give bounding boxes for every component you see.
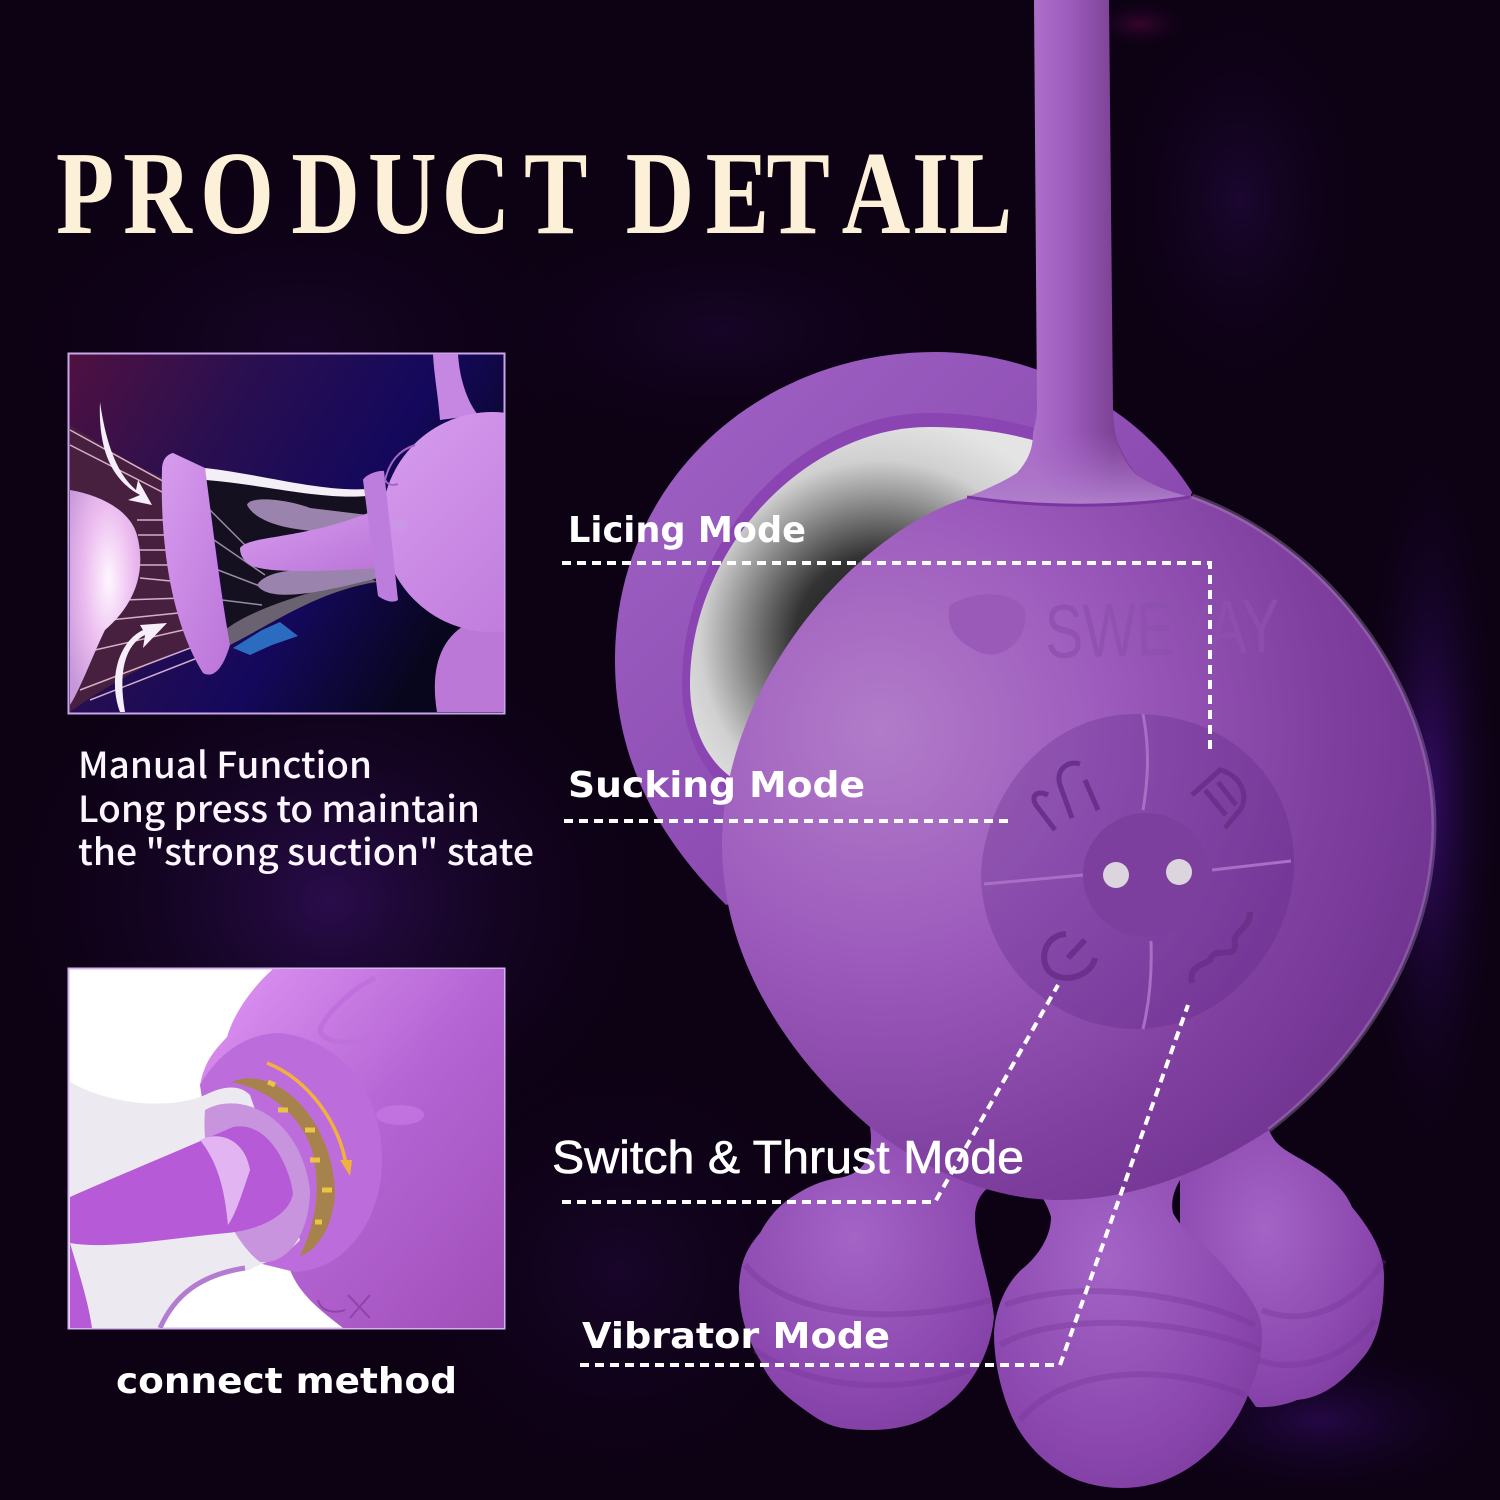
foot ridges [745, 1260, 1384, 1420]
certification marks [318, 1295, 370, 1318]
manual function text: Long press to maintain [78, 781, 480, 833]
right foot [1180, 1120, 1384, 1407]
manual function text: the "strong suction" state [78, 824, 534, 876]
glow on the left of the panel [70, 490, 140, 705]
tongue shapes [240, 499, 382, 595]
inner clear cylinder [204, 1103, 310, 1262]
callout: vibrator mode: Vibrator Mode [582, 1316, 890, 1357]
device body in panel [363, 354, 504, 712]
callout: licing mode: Licing Mode [568, 510, 806, 551]
panel: manual function image [68, 352, 506, 714]
panel: connect method image [68, 968, 504, 1328]
purple base strip [70, 1243, 92, 1328]
icon: power [1044, 934, 1095, 978]
device body close-up [200, 969, 504, 1328]
yellow inner band [232, 1078, 335, 1256]
back ring [615, 352, 1192, 905]
cup rim [162, 453, 230, 675]
small embossed bump [376, 1105, 424, 1125]
callout: switch and thrust mode: Switch & Thrust Mode [552, 1131, 1024, 1183]
title: PRODUCT DETAIL [56, 128, 1012, 260]
manual function text: Manual Function [78, 737, 372, 789]
middle foot [994, 1120, 1262, 1488]
collar ring [200, 1033, 382, 1272]
glass funnel [70, 1082, 300, 1328]
glass lower rim [160, 1268, 245, 1328]
blue coil [233, 622, 298, 655]
embossed curve [320, 978, 375, 1042]
curved yellow arrow [267, 1063, 352, 1176]
glass funnel [205, 468, 377, 645]
tongue [70, 1126, 293, 1245]
product illustration [615, 0, 1434, 1488]
callout: switch and thrust mode [552, 985, 1058, 1202]
connect method caption: connect method [116, 1361, 457, 1402]
icon: lick mode [1192, 770, 1244, 828]
sphere top seam [967, 497, 1190, 505]
manual function text [78, 737, 534, 876]
stem flare highlight [967, 430, 1190, 505]
icon: wave [1191, 912, 1250, 983]
control pad [981, 714, 1294, 1029]
embossed logo [949, 584, 1281, 675]
main sphere [722, 496, 1434, 1200]
icon: suck mode [1034, 763, 1098, 830]
callout: licing mode [562, 510, 1210, 755]
embossed logo: SWEYAY [1044, 584, 1281, 675]
stem [967, 0, 1190, 505]
callout: vibrator mode [580, 1005, 1188, 1365]
flow arrows [100, 402, 167, 712]
small yellow arrows [268, 1082, 332, 1222]
suction streaks [70, 425, 205, 712]
left foot [739, 1120, 1012, 1430]
sphere rim light [1192, 496, 1434, 1130]
callout: sucking mode: Sucking Mode [568, 765, 865, 806]
